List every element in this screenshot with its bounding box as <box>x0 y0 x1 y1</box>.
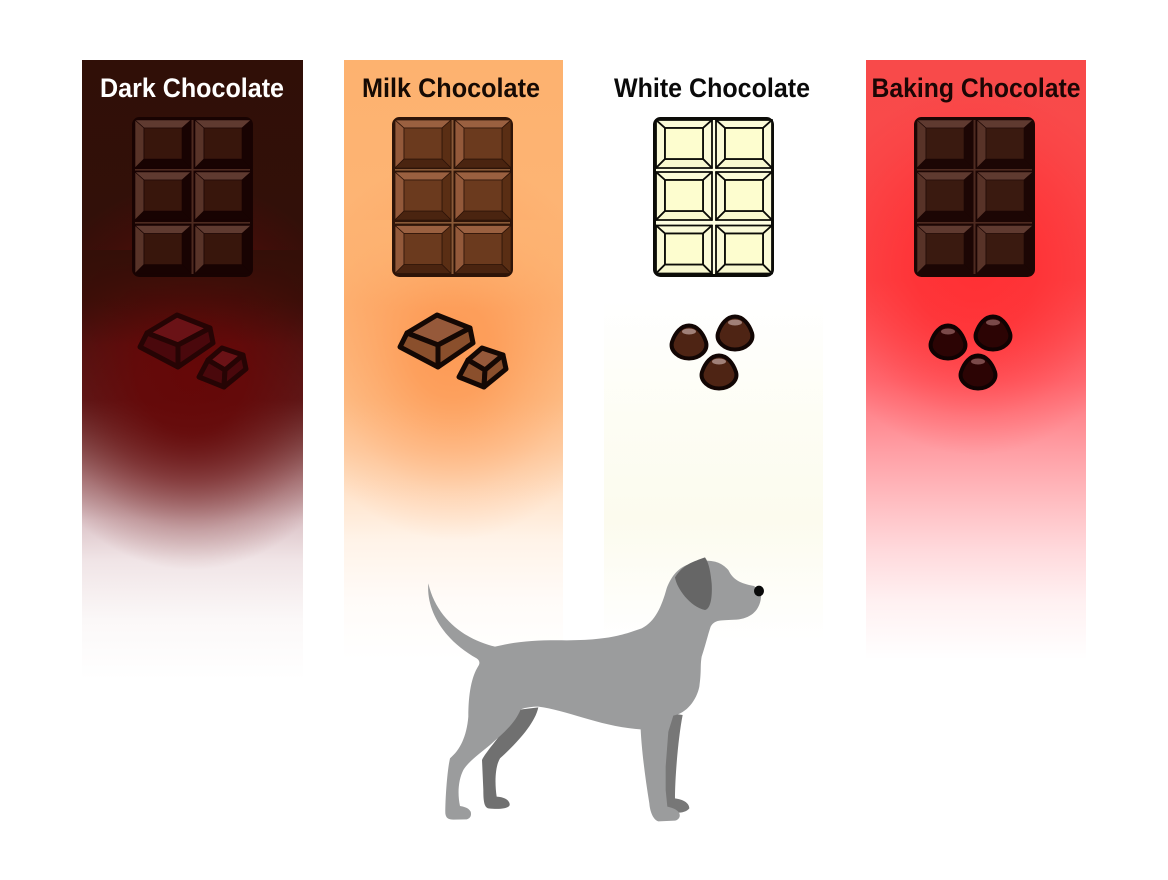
dark chocolate column background <box>82 60 303 680</box>
milk chocolate column background <box>344 60 563 660</box>
far hind leg <box>482 707 538 809</box>
heading: baking chocolate: Baking Chocolate <box>872 73 1080 103</box>
far front leg <box>664 713 689 813</box>
panel: dark chocolate <box>82 60 303 680</box>
icon: dark chocolate chunks <box>140 315 246 387</box>
panel: baking chocolate <box>866 60 1086 660</box>
panel: white chocolate <box>604 73 823 640</box>
white chocolate column background <box>604 300 823 640</box>
dog silhouette <box>428 557 764 821</box>
icon: dark chocolate bar <box>134 118 252 276</box>
icon: milk chocolate chunks <box>400 315 506 387</box>
icon: white chocolate bar <box>654 118 772 276</box>
dog ear <box>675 557 712 610</box>
heading: dark chocolate: Dark Chocolate <box>100 73 284 103</box>
heading: milk chocolate: Milk Chocolate <box>362 73 540 103</box>
icon: baking chocolate bar <box>916 118 1034 276</box>
icon: milk chocolate bar <box>394 118 512 276</box>
icon: baking chocolate chips <box>931 316 1010 388</box>
icon: chocolate chips <box>672 316 752 388</box>
dog nose <box>754 586 764 596</box>
dog body <box>428 561 762 821</box>
panel: milk chocolate <box>344 60 563 660</box>
baking chocolate column background <box>866 60 1086 660</box>
heading: white chocolate: White Chocolate <box>614 73 810 103</box>
